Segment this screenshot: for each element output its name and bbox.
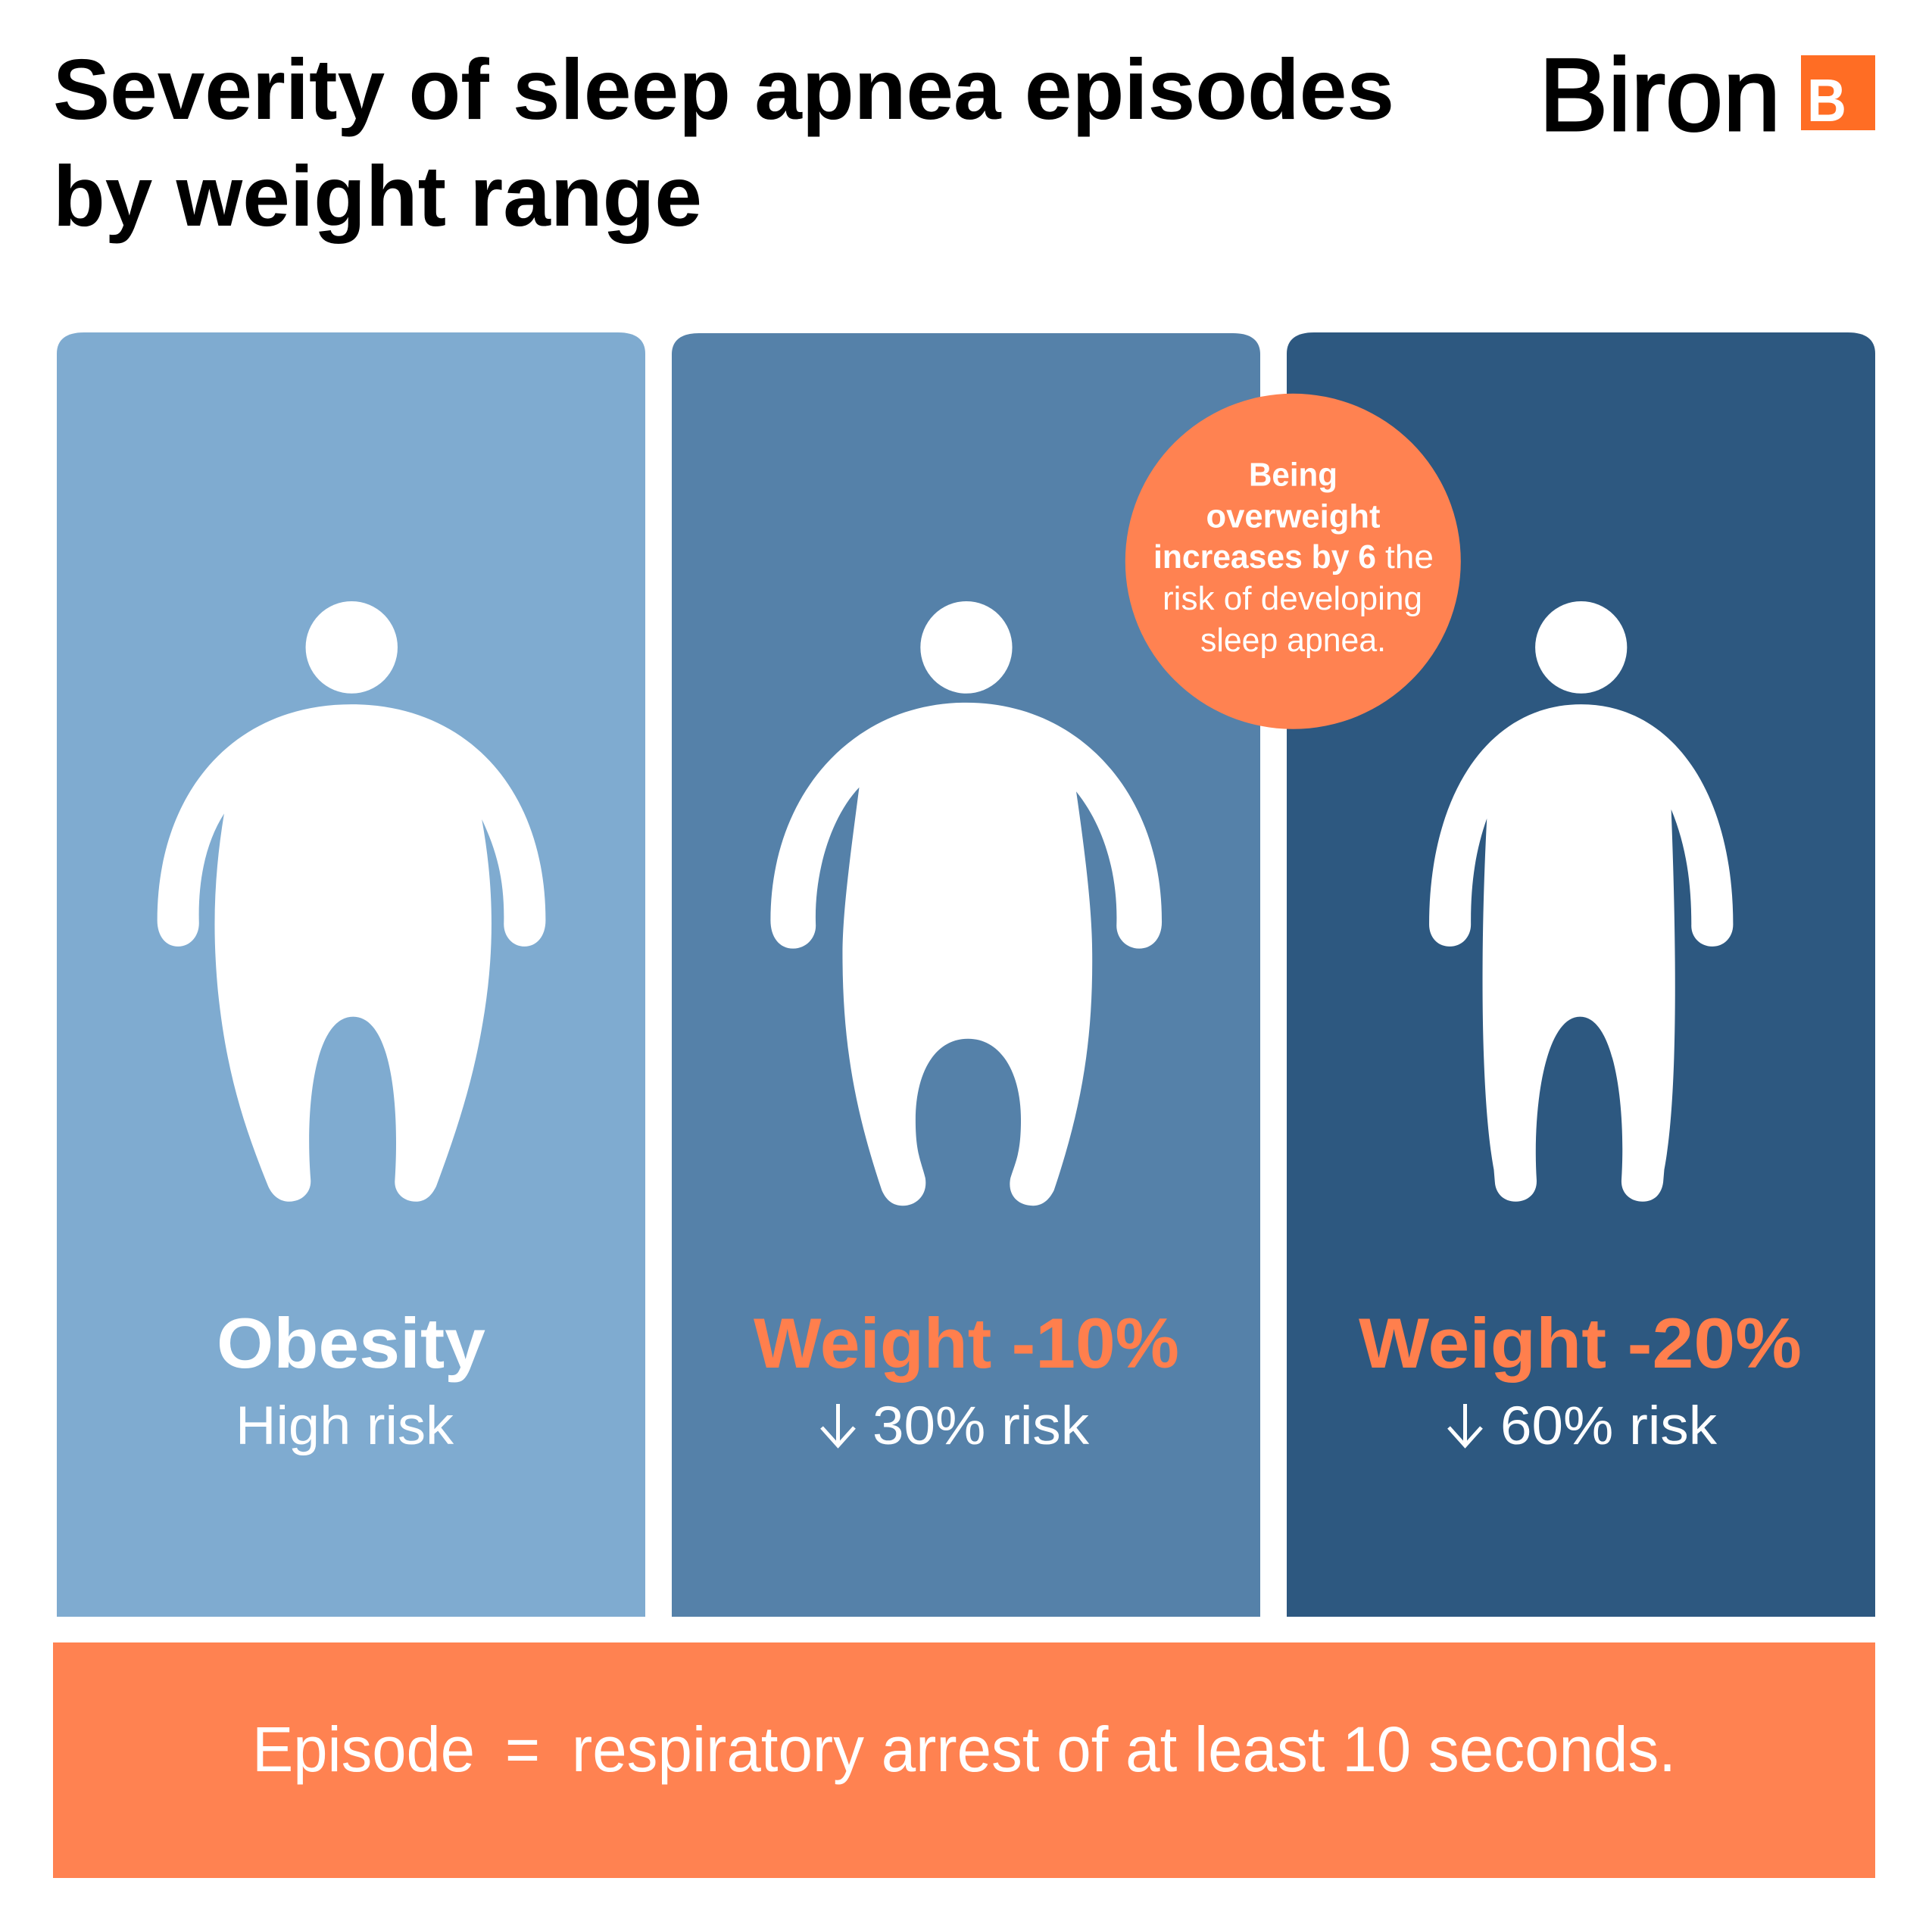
icon: obese figure	[158, 601, 545, 1202]
title: Severity of sleep apnea episodes	[53, 42, 1394, 137]
callout: overweight risk	[1125, 394, 1461, 729]
panel heading: Weight -10%	[754, 1303, 1179, 1383]
panel background	[672, 333, 1260, 1617]
definition text: Episode	[252, 1714, 475, 1785]
risk label: 30% risk	[872, 1396, 1090, 1456]
icon: down arrow	[822, 1404, 854, 1446]
callout text: sleep apnea.	[1200, 622, 1386, 659]
callout text: Being	[1249, 457, 1337, 494]
panel: obesity	[57, 332, 645, 1617]
risk label: 60% risk	[1500, 1396, 1718, 1456]
logo wordmark: Biron	[1539, 37, 1781, 152]
icon: down arrow	[1449, 1404, 1481, 1446]
callout text: the	[1385, 538, 1434, 576]
bar background	[53, 1642, 1875, 1878]
logo square	[1801, 55, 1875, 134]
callout text: risk of developing	[1163, 580, 1422, 617]
callout circle	[1125, 394, 1461, 729]
title: by weight range	[53, 148, 702, 244]
callout text	[1153, 457, 1434, 659]
callout text: increases by 6	[1153, 538, 1376, 576]
callout text: overweight	[1206, 498, 1381, 535]
icon: figure after 20% weight loss	[1429, 601, 1733, 1202]
logo square: B	[1807, 67, 1846, 134]
panel background	[57, 332, 645, 1617]
title	[53, 42, 1394, 244]
definition text: respiratory arrest of at least 10 seconds.	[572, 1714, 1676, 1785]
panel heading: Weight -20%	[1359, 1303, 1802, 1383]
definition text: =	[505, 1714, 540, 1785]
icon: figure after 10% weight loss	[770, 601, 1162, 1206]
panel background	[1287, 332, 1875, 1617]
panel heading: Obesity	[217, 1303, 485, 1383]
risk label: High risk	[236, 1396, 454, 1456]
definition bar	[53, 1642, 1875, 1878]
panel: weight -20%	[1287, 332, 1875, 1617]
logo: Biron	[1539, 37, 1875, 152]
panel: weight -10%	[672, 333, 1260, 1617]
